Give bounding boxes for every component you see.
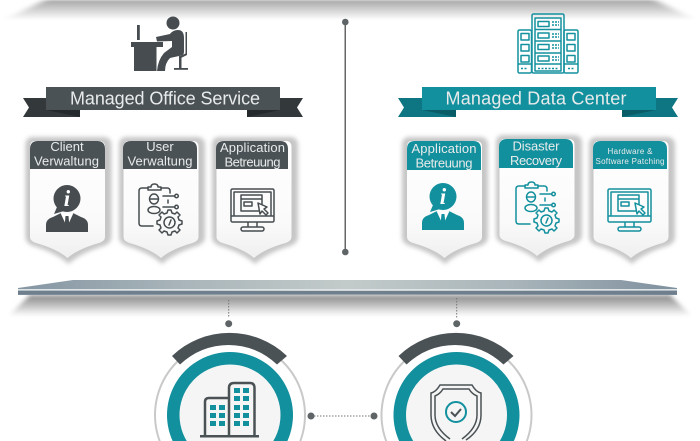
card: Application Betreuung (data center) <box>402 137 488 264</box>
card: Client Verwaltung <box>26 137 112 264</box>
banner: Managed Office Service: Managed Office Service <box>70 88 260 108</box>
connector: between circles <box>308 412 378 420</box>
card: Client Verwaltung: Verwaltung <box>34 154 99 168</box>
card: Hardware & Software Patching: Hardware & <box>608 147 653 156</box>
icon: monitor with cursor <box>231 189 274 231</box>
card: User Verwaltung: User <box>146 139 174 154</box>
card: Application Betreuung (office) <box>212 137 298 264</box>
connector: bar to right circle <box>453 298 460 327</box>
card: Hardware & Software Patching <box>589 137 675 264</box>
icon: person at desk <box>131 16 188 71</box>
card: Application Betreuung (office): Betreuung <box>224 154 280 170</box>
card: Disaster Recovery: Recovery <box>510 153 562 168</box>
divider line <box>342 19 349 255</box>
card: User Verwaltung <box>119 137 205 264</box>
badge: building <box>154 333 306 441</box>
card: Application Betreuung (data center): Betreuung <box>416 156 472 170</box>
card: Disaster Recovery <box>496 135 582 262</box>
icon: shield with check <box>431 385 481 441</box>
icon: clipboard with gear <box>139 184 182 235</box>
icon: person with info bubble <box>46 185 88 232</box>
platform bar <box>8 280 692 316</box>
card: Application Betreuung (office): Application <box>220 140 285 155</box>
card: User Verwaltung: Verwaltung <box>128 154 192 168</box>
icon: data center servers <box>518 14 578 73</box>
connector: bar to left circle <box>225 300 232 327</box>
card: Disaster Recovery: Disaster <box>512 138 560 154</box>
banner: Managed Office Service <box>23 87 303 117</box>
badge: shield <box>381 333 532 441</box>
icon: teal clipboard with gear <box>516 182 559 233</box>
banner: Managed Data Center: Managed Data Center <box>446 88 626 108</box>
card: Application Betreuung (data center): Application <box>412 141 476 156</box>
icon: teal monitor with cursor <box>608 189 651 231</box>
banner: Managed Data Center <box>398 87 678 117</box>
card: Hardware & Software Patching: Software Patching <box>596 157 664 166</box>
icon: office buildings <box>200 383 259 438</box>
icon: teal person with info bubble <box>422 183 464 230</box>
card: Client Verwaltung: Client <box>50 139 84 154</box>
top shadow band <box>5 0 695 20</box>
